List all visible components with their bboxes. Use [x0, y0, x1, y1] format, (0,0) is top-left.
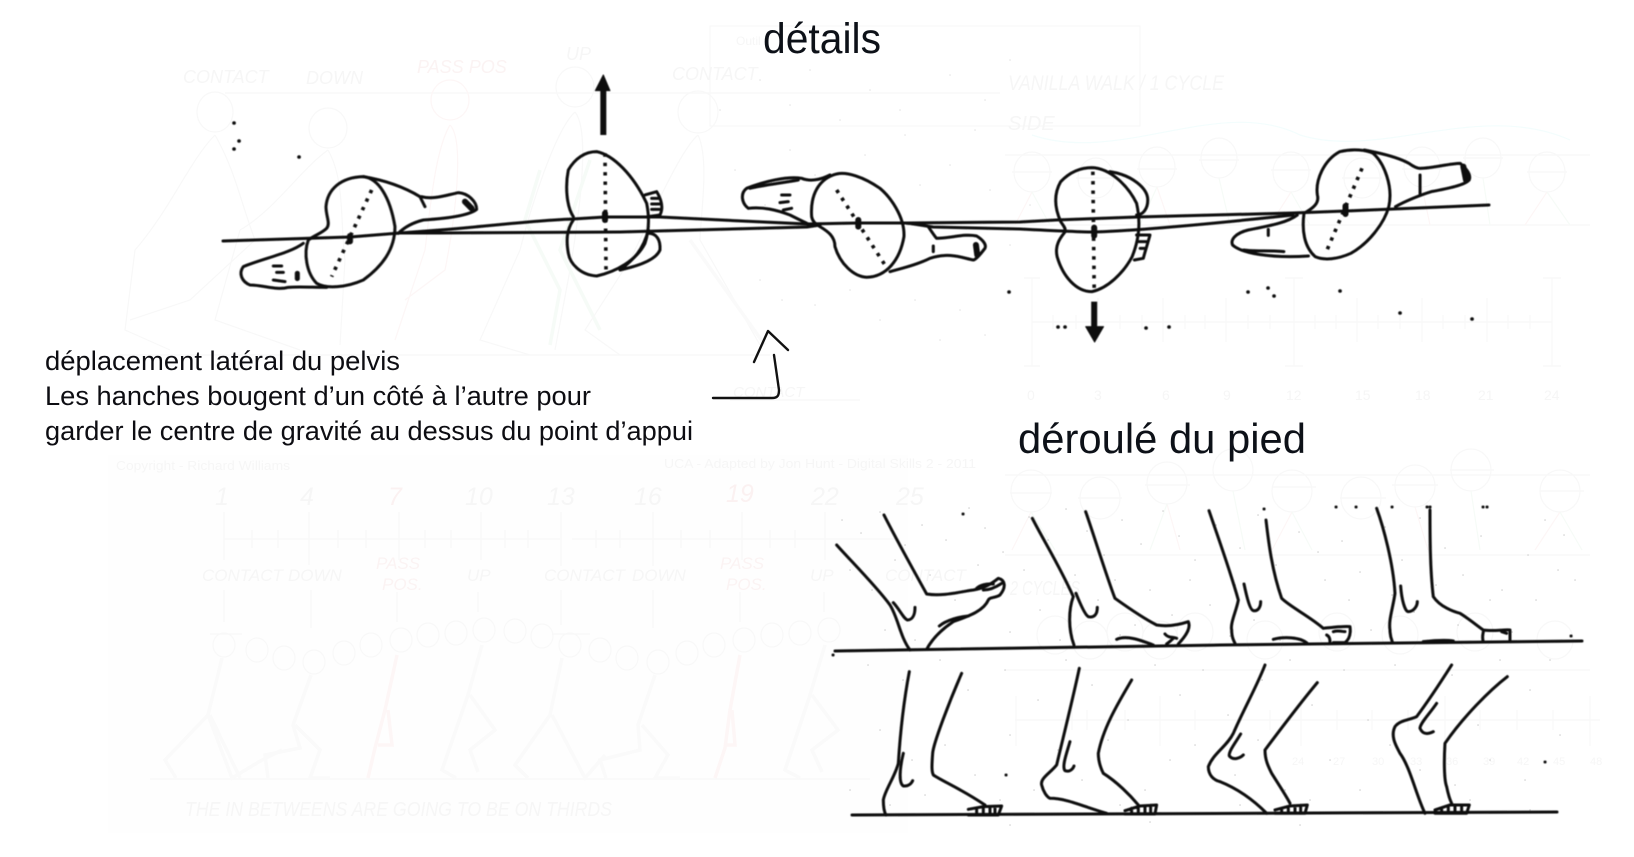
pelvis view 2 and up arrow [567, 75, 662, 276]
faint background: bottom-left walk cycle sheet: THE IN BETWEENS ARE GOING TO BE ON THIRDS [185, 799, 613, 821]
faint background: bottom-left walk cycle sheet: CONTACT [885, 566, 968, 585]
foot rolling sequence, bottom row, first two feet [883, 668, 1157, 815]
faint background: bottom-left walk cycle sheet: 25 [895, 483, 924, 511]
faint background: foot section stick figures and timeline: 39 [1483, 756, 1495, 768]
faint background: top walk cycle sheet: 12 [1286, 387, 1302, 403]
faint background: bottom-left walk cycle sheet: 1 [215, 483, 229, 511]
faint background: top walk cycle sheet: 6 [1162, 387, 1170, 403]
faint background: foot section stick figures and timeline [1005, 449, 1602, 768]
foot rolling sequence, top row, first two feet [837, 512, 1189, 650]
ground lines [835, 641, 1582, 815]
title: détails: détails [763, 15, 881, 63]
faint background: top walk cycle sheet: 21 [1478, 387, 1494, 403]
faint background: top walk cycle sheet: CONTACT [733, 384, 806, 401]
faint background: bottom-left walk cycle sheet: DOWN [632, 566, 687, 585]
faint background: top walk cycle sheet: CONTACT [183, 67, 271, 87]
faint background: top walk cycle sheet: PASS POS [417, 57, 507, 77]
text block: pelvis explanation: Les hanches bougent d’un côté à l’autre pour [45, 381, 591, 411]
faint background: top walk cycle sheet: UP [566, 44, 591, 64]
faint background: bottom-left walk cycle sheet: CONTACT [544, 566, 627, 585]
faint speckle over the pelvis row [720, 60, 1030, 340]
faint background: bottom-left walk cycle sheet: UP [810, 566, 834, 585]
text block: pelvis explanation: garder le centre de gravité au dessus du point d’appui [45, 416, 693, 446]
faint background: top walk cycle sheet: 24 [1544, 387, 1560, 403]
faint background: foot section stick figures and timeline: 42 [1517, 756, 1529, 768]
faint background: bottom-left walk cycle sheet: 22 [810, 483, 839, 511]
text block: pelvis explanation: déplacement latéral du pelvis [45, 346, 400, 376]
faint background: top walk cycle sheet: 0 [1027, 387, 1035, 403]
faint background: bottom-left walk cycle sheet: CONTACT [202, 566, 285, 585]
faint background: bottom-left walk cycle sheet: POS. [382, 575, 423, 594]
horizontal reference lines through the pelvis [223, 205, 1489, 241]
pelvis view 5 [1232, 150, 1470, 259]
faint background: bottom-left walk cycle sheet: 19 [726, 480, 754, 508]
pelvis diagram with lateral shift [223, 75, 1489, 342]
faint background: foot section stick figures and timeline: 30 [1372, 756, 1384, 768]
faint background: bottom-left walk cycle sheet: UCA - Adapted by Jon Hunt - Digital Skills 2 - 2011 [664, 456, 976, 471]
faint background: bottom-left walk cycle sheet: DOWN [288, 566, 343, 585]
faint background: top walk cycle sheet: 15 [1355, 387, 1371, 403]
faint background: foot section stick figures and timeline: 36 [1446, 756, 1458, 768]
faint background: top walk cycle sheet: 9 [1223, 387, 1231, 403]
faint background: top walk cycle sheet: SIDE [1008, 113, 1055, 135]
faint background: bottom-left walk cycle sheet: 4 [300, 483, 314, 511]
foot roll diagram [833, 507, 1582, 815]
faint background: top walk cycle sheet: 18 [1415, 387, 1431, 403]
faint background: foot section stick figures and timeline: 27 [1333, 756, 1345, 768]
faint background: bottom-left walk cycle sheet: PASS [720, 554, 765, 573]
faint background: bottom-left walk cycle sheet: 16 [634, 483, 662, 511]
faint background: foot section stick figures and timeline: 48 [1590, 756, 1602, 768]
faint background: bottom-left walk cycle sheet: UP [467, 566, 491, 585]
pelvis view 3 [742, 173, 985, 277]
arrow: callout from text to pelvis [713, 331, 788, 398]
faint background: bottom-left walk cycle sheet: POS. [726, 575, 767, 594]
ink specks [234, 123, 1472, 328]
faint background: top walk cycle sheet: VANILLA WALK / 1 CYCLE [1008, 72, 1225, 95]
faint background: top walk cycle sheet [120, 26, 1590, 403]
foot rolling sequence, top row, last two feet [1209, 508, 1510, 643]
faint background: top walk cycle sheet: 3 [1094, 387, 1102, 403]
faint background: foot section stick figures and timeline: 24 [1292, 756, 1304, 768]
title: déroulé du pied: déroulé du pied [1018, 415, 1306, 462]
speckle noise over the scan [842, 508, 1575, 825]
faint background: bottom-left walk cycle sheet: PASS [376, 554, 421, 573]
faint background: bottom-left walk cycle sheet: Copyright - Richard Williams [116, 458, 291, 473]
foot rolling sequence, bottom row, last two feet [1208, 665, 1507, 813]
faint background: bottom-left walk cycle sheet [108, 455, 976, 833]
faint background: top walk cycle sheet: CONTACT [672, 64, 760, 84]
faint background: bottom-left walk cycle sheet: 10 [465, 483, 493, 511]
faint background: top walk cycle sheet: Outil [736, 34, 761, 48]
faint background: foot section stick figures and timeline: 33 [1410, 756, 1422, 768]
faint background: bottom-left walk cycle sheet: 7 [388, 483, 403, 511]
faint background: bottom-left walk cycle sheet: 13 [547, 483, 575, 511]
faint background: foot section stick figures and timeline: 2 CYCLES [1009, 578, 1080, 600]
ink specks [833, 507, 1571, 775]
pelvis view 1 [241, 177, 477, 288]
faint background: top walk cycle sheet: DOWN [306, 68, 364, 88]
pelvis view 4 and down arrow [1056, 168, 1150, 342]
faint background: foot section stick figures and timeline: 45 [1553, 756, 1565, 768]
